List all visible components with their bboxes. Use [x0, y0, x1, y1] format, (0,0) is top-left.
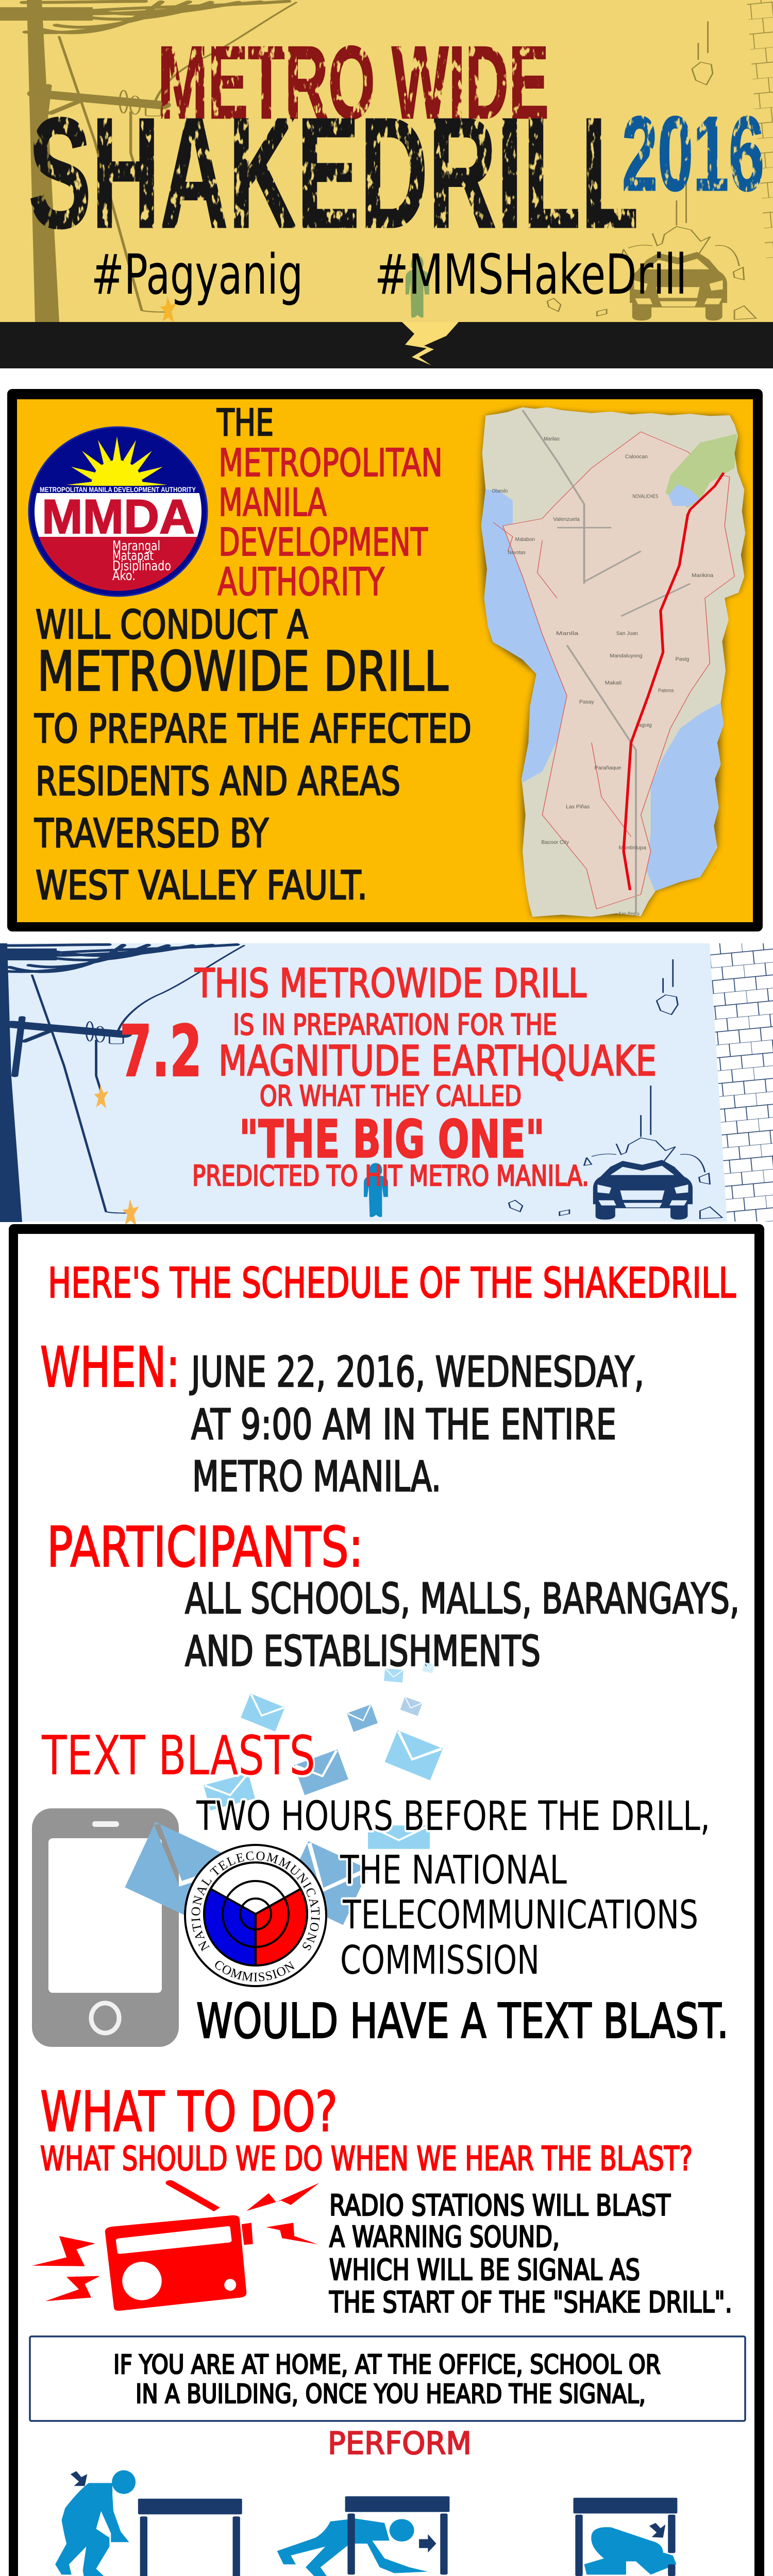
black ground band [0, 322, 773, 368]
icon: hold on [574, 2498, 677, 2576]
callout: indoors: IN A BUILDING, ONCE YOU HEARD THE SIGNAL, [136, 2379, 646, 2410]
map: fault line [624, 472, 724, 890]
map: west valley fault: Navotas [508, 549, 526, 555]
text: ntc name [340, 1848, 698, 1984]
mmda logo: MMDA [42, 489, 195, 544]
mmda logo: Matapat [112, 548, 154, 564]
heading: mmda full name: MANILA [219, 481, 327, 525]
text: ntc name: COMMISSION [340, 1938, 540, 1984]
participants block: PARTICIPANTS: [47, 1516, 363, 1580]
mmda logo [29, 427, 207, 599]
header illustration: utility pole [27, 0, 59, 322]
map: west valley fault: Las Piñas [566, 804, 590, 810]
map: west valley fault: Obando [492, 488, 508, 494]
preparation text block: MAGNITUDE EARTHQUAKE [219, 1037, 657, 1085]
map: west valley fault: Muntinlupa [619, 844, 646, 851]
transformer [0, 948, 57, 960]
icons: flying envelopes [125, 1662, 443, 1929]
header illustration: falling debris [547, 21, 756, 319]
when block [40, 1336, 644, 1501]
intro text block: RESIDENTS AND AREAS [36, 759, 400, 805]
preparation text block: THIS METROWIDE DRILL [194, 961, 586, 1007]
callout: indoors: IF YOU ARE AT HOME, AT THE OFFICE, SCHOOL OR [113, 2350, 661, 2380]
ground crack [402, 322, 459, 365]
map: west valley fault [473, 403, 754, 923]
preparation text block: PREDICTED TO HIT METRO MANILA. [192, 1160, 589, 1192]
map: west valley fault: Bacoor City [541, 839, 569, 845]
icon: cover [277, 2496, 449, 2576]
heading: what to do: WHAT TO DO? [40, 2080, 338, 2144]
map: west valley fault: Marikina [692, 572, 713, 579]
when block: WHEN: [40, 1336, 180, 1400]
text: radio stations: A WARNING SOUND, [329, 2221, 560, 2254]
preparation text block: OR WHAT THEY CALLED [260, 1080, 522, 1112]
when block: AT 9:00 AM IN THE ENTIRE [191, 1401, 616, 1449]
map: west valley fault: NOVALICHES [632, 493, 658, 499]
preparation text block [120, 961, 657, 1192]
map: west valley fault: Pasig [676, 656, 689, 662]
when block: METRO MANILA. [192, 1453, 441, 1501]
participants block: AND ESTABLISHMENTS [185, 1628, 541, 1676]
map: west valley fault: Mandaluyong [610, 653, 642, 658]
map: west valley fault: Pasay [579, 699, 594, 705]
mmda logo: Ako. [112, 568, 136, 584]
text: ntc name: THE NATIONAL [340, 1848, 567, 1893]
icon: phone [32, 1808, 179, 2047]
text: radio stations: WHICH WILL BE SIGNAL AS [329, 2253, 640, 2287]
text: radio stations: RADIO STATIONS WILL BLAST [329, 2189, 671, 2223]
icon: radio [32, 2180, 320, 2311]
spark lower [123, 1199, 139, 1226]
intro text block: WEST VALLEY FAULT. [36, 863, 367, 909]
participants block [47, 1516, 740, 1676]
preparation text block: IS IN PREPARATION FOR THE [233, 1008, 557, 1041]
intro text block: METROWIDE DRILL [37, 640, 448, 703]
intro text block: TO PREPARE THE AFFECTED [34, 706, 472, 752]
mmda logo: METROPOLITAN MANILA DEVELOPMENT AUTHORITY [40, 485, 196, 494]
map: west valley fault: Taguig [636, 722, 652, 728]
mmda logo: Marangal [112, 538, 160, 554]
heading: the: THE [216, 401, 274, 444]
header illustration: wires [23, 1, 296, 312]
map: west valley fault: San Juan [616, 630, 638, 636]
hashtag: pagyanig: #Pagyanig [91, 243, 303, 307]
map: west valley fault: Parañaque [595, 765, 621, 771]
heading: mmda full name [217, 441, 443, 604]
damaged car [593, 1160, 693, 1219]
map: west valley fault: Makati [605, 680, 621, 686]
intro text block [34, 602, 472, 909]
falling debris [509, 959, 722, 1218]
utility pole [0, 943, 22, 1222]
map: west valley fault: Malabon [515, 536, 535, 543]
wires [0, 944, 244, 1213]
map: west valley fault: Marilao [544, 436, 560, 442]
map: west valley fault: San Pedro [619, 911, 640, 917]
intro text block: TRAVERSED BY [34, 811, 269, 857]
ntc logo: NATIONAL TELECOMMUNICATIONS [192, 1852, 320, 1952]
heading: perform: PERFORM [328, 2426, 472, 2462]
panel: mmda intro [7, 389, 763, 931]
panel: schedule [9, 1224, 764, 2576]
map: west valley fault: Caloocan [625, 453, 648, 460]
callout: indoors [30, 2336, 745, 2421]
header illustration: person [406, 256, 429, 317]
header banner [0, 0, 773, 368]
preparation text block: "THE BIG ONE" [239, 1109, 545, 1170]
spark upper [94, 1085, 108, 1109]
ntc logo [184, 1844, 327, 1987]
heading: mmda full name: METROPOLITAN [219, 441, 443, 485]
header illustration: spark [160, 296, 177, 323]
heading: mmda full name: AUTHORITY [217, 560, 385, 604]
map: west valley fault: Pateros [658, 687, 674, 693]
header illustration: damaged car [630, 252, 727, 320]
heading: mmda full name: DEVELOPMENT [219, 520, 428, 565]
header illustration: brick wall [747, 0, 773, 268]
brick wall [710, 943, 773, 1222]
heading: text blasts: TEXT BLASTS [41, 1724, 315, 1787]
icon: drop [55, 2470, 242, 2576]
ntc logo: COMMISSION [215, 1961, 295, 1981]
person [364, 1163, 388, 1217]
intro text block: WILL CONDUCT A [36, 602, 308, 648]
header illustration: transformer [0, 7, 93, 21]
mmda logo: Disiplinado [112, 558, 171, 574]
map: west valley fault: Valenzuela [553, 516, 580, 522]
map: west valley fault: Manila [556, 630, 578, 636]
text: radio stations [329, 2189, 732, 2319]
preparation text block: 7.2 [120, 1011, 202, 1093]
mmda logo: sun [66, 436, 167, 486]
panel: the big one [0, 943, 773, 1226]
